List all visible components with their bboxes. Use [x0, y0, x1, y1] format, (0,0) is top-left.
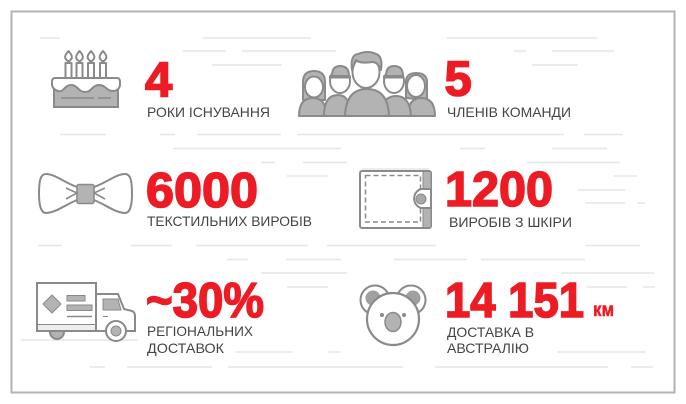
number: 14 151 km: 14 151	[445, 274, 584, 328]
icon: wallet	[360, 171, 431, 228]
label: years: РОКИ ІСНУВАННЯ	[147, 104, 270, 120]
number: 6000: 6000	[146, 164, 258, 218]
number: 5: 5	[444, 52, 472, 106]
label: textile products: ТЕКСТИЛЬНИХ ВИРОБІВ	[147, 213, 312, 229]
label: delivery to Australia: ДОСТАВКА В	[447, 324, 534, 340]
label: regional deliveries: РЕГІОНАЛЬНИХ	[147, 323, 254, 339]
icon: birthday cake	[52, 51, 120, 107]
number: 14 151 km: км	[593, 300, 614, 321]
icon: delivery truck	[37, 283, 135, 341]
icon: team of five people	[299, 52, 435, 116]
number: 4: 4	[145, 54, 172, 108]
label: leather products: ВИРОБІВ З ШКІРИ	[449, 214, 572, 230]
icon: bow tie	[39, 174, 132, 213]
number: 1200: 1200	[445, 163, 553, 217]
label: regional deliveries	[147, 323, 254, 356]
label: delivery to Australia: АВСТРАЛІЮ	[447, 340, 529, 356]
label: delivery to Australia	[447, 324, 534, 356]
number: 30 percent: ~30%	[146, 274, 264, 328]
icon: koala	[360, 286, 426, 345]
label: regional deliveries: ДОСТАВОК	[147, 340, 225, 356]
label: team members: ЧЛЕНІВ КОМАНДИ	[447, 104, 571, 120]
